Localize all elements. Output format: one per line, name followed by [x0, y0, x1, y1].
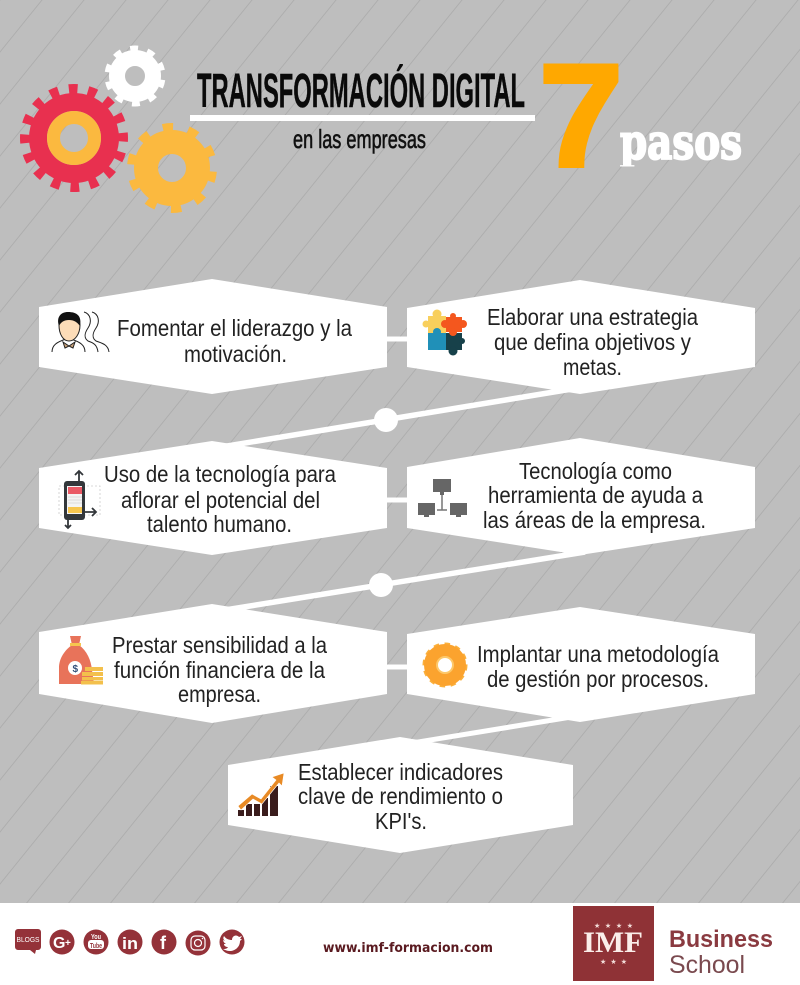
icon: google plus [50, 930, 74, 954]
text: step strategy: metas. [563, 354, 622, 380]
icon: puzzle [422, 310, 467, 356]
title underline [190, 115, 535, 121]
panel: step leadership [39, 279, 387, 394]
icon: blogs: BLOGS [16, 937, 40, 944]
logo: IMF: ★★★ [600, 958, 627, 966]
text: step technology [483, 458, 706, 533]
icon: youtube [84, 930, 108, 954]
icon: google plus: + [65, 938, 71, 949]
text: step KPI: Establecer indicadores [298, 759, 503, 785]
logo: IMF: IMF [583, 926, 643, 959]
icon: money bag [59, 636, 103, 684]
icon: network [418, 479, 467, 517]
icon: red gear [20, 84, 128, 192]
social icons [15, 929, 244, 956]
text: step KPI: KPI's. [375, 808, 427, 834]
logo: IMF: ★★★★ [594, 922, 633, 930]
panel: footer [0, 903, 800, 985]
icon: twitter [220, 930, 244, 954]
icon: facebook [152, 930, 176, 954]
icon: youtube: Tube [90, 943, 102, 950]
text: step process [477, 641, 719, 692]
heading: pasos: pasos [620, 113, 742, 171]
icon: google plus: G [53, 935, 65, 952]
text: step finance: empresa. [178, 681, 261, 707]
text: step leadership [117, 315, 352, 367]
text: step strategy [487, 304, 698, 380]
text: step KPI [298, 759, 503, 834]
icon: instagram [186, 930, 210, 956]
text: step technology: herramienta de ayuda a [488, 482, 703, 508]
text: step talent [104, 461, 336, 537]
panel: step strategy [407, 280, 755, 394]
text: step process: de gestión por procesos. [487, 666, 709, 692]
website url: www.imf-formacion.com [323, 941, 493, 956]
text: step strategy: que defina objetivos y [494, 329, 691, 355]
logo: IMF [573, 906, 654, 981]
panel: step KPI [228, 737, 573, 853]
text: step leadership: motivación. [184, 341, 287, 367]
panel: step technology [407, 438, 755, 555]
icon: facebook: f [160, 933, 167, 953]
icon: blogs [15, 929, 41, 954]
text: step technology: Tecnología como [519, 458, 672, 484]
icon: yellow gear [128, 124, 216, 212]
panel: step finance [39, 604, 387, 723]
text: step strategy: Elaborar una estrategia [487, 304, 698, 330]
icon: people [52, 312, 109, 352]
text: step process: Implantar una metodología [477, 641, 719, 667]
panel: step talent [39, 441, 387, 555]
icon: white gear [104, 45, 166, 107]
logo: Business School [669, 926, 773, 979]
icon: responsive phone [59, 471, 100, 528]
logo: Business School: School [669, 951, 745, 979]
text: step finance [112, 632, 327, 707]
icon: linkedin [118, 930, 142, 954]
connectors between steps [215, 339, 585, 743]
text: step leadership: Fomentar el liderazgo y la [117, 315, 352, 341]
logo: Business School: Business [669, 926, 773, 953]
icon: linkedin: in [122, 934, 138, 953]
text: step technology: las áreas de la empresa. [483, 507, 706, 533]
big number 7: 7 [539, 34, 623, 197]
text: step KPI: clave de rendimiento o [298, 783, 503, 809]
text: step talent: Uso de la tecnología para [104, 461, 336, 487]
icon: money bag: $ [72, 664, 78, 675]
text: step finance: función financiera de la [114, 657, 325, 683]
panel: step process [407, 607, 755, 722]
subtitle: en las empresas [293, 124, 426, 154]
text: step talent: aflorar el potencial del [121, 487, 320, 513]
icon: gears [20, 45, 216, 212]
icon: youtube: You [91, 934, 101, 941]
text: step finance: Prestar sensibilidad a la [112, 632, 327, 658]
icon: growth chart [238, 773, 284, 816]
icon: orange gear [424, 644, 466, 686]
text: step talent: talento humano. [147, 511, 292, 537]
